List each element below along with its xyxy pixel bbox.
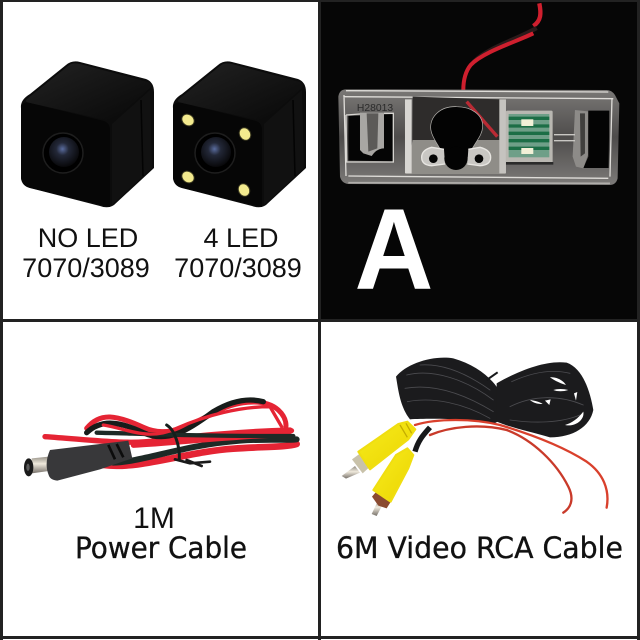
LED circuit board [506,111,553,163]
yellow RCA plug, bottom [372,448,413,516]
label: Power Cable: Power Cable [75,531,247,565]
centre recess [413,97,500,140]
label: no LED [22,223,150,283]
part number: H28013 [357,103,393,114]
label: 1M: 1M [133,502,175,535]
clear plastic plate [338,89,619,185]
label: 4 LED: 4 LED [203,223,279,253]
panel: video RCA cable [336,358,623,565]
label: 6M Video RCA Cable: 6M Video RCA Cable [336,531,623,565]
label: no LED: 7070/3089 [22,253,150,283]
icon: camera without LED [21,61,154,207]
letter A: A [355,184,433,314]
black coil [396,358,593,452]
red and black wire [463,3,540,90]
panel: power cable [24,400,297,565]
right window [583,111,609,168]
lens [195,133,235,173]
red wires [415,420,607,513]
label: no LED: NO LED [38,223,138,253]
LEDs [180,112,253,198]
panel: cameras [21,61,306,283]
yellow RCA plug, top [342,422,415,479]
lens [43,133,83,173]
label: 4 LED: 7070/3089 [174,253,302,283]
keyhole opening [431,107,483,165]
icon: power cable with barrel plug [24,400,297,481]
panel: mounting bracket A [320,2,638,319]
label: 4 LED [174,223,302,283]
left window [348,114,394,161]
cable loops [45,400,297,466]
icon: camera with 4 LED [173,61,306,207]
icon: RCA cable coil [342,358,607,516]
bracket with wire [338,3,619,185]
barrel plug [24,441,132,481]
